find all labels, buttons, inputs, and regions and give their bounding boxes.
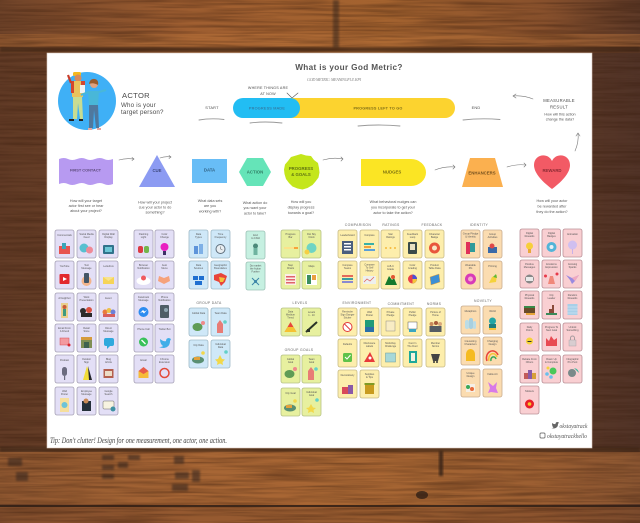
measurable result: RESULT bbox=[550, 104, 568, 110]
shape: first contact: FIRST CONTACT bbox=[70, 168, 102, 172]
cards: first contact bbox=[55, 230, 118, 415]
cards: first contact: Blog bbox=[106, 358, 112, 361]
measurable result: How will this action bbox=[544, 112, 576, 116]
cards: enhancers: Changing bbox=[487, 340, 498, 343]
shape: data bbox=[192, 159, 227, 183]
shape: first contact bbox=[59, 158, 113, 185]
question: progress: display progress bbox=[288, 206, 315, 210]
cards: progress and goals: Charts bbox=[287, 267, 295, 270]
cards: enhancers bbox=[461, 230, 502, 397]
cards: nudges: Public bbox=[409, 311, 417, 314]
cards: progress and goals: Goal bbox=[309, 394, 315, 397]
question: reward: they do the action? bbox=[536, 210, 568, 214]
cards: enhancers: Activities bbox=[488, 236, 498, 239]
actor label: Who is your bbox=[121, 102, 156, 109]
question: data bbox=[198, 199, 222, 214]
cards: reward: Rewards bbox=[525, 235, 535, 238]
cards: nudges: Compare bbox=[364, 234, 375, 237]
cards: first contact: Message bbox=[81, 393, 92, 396]
cards: first contact: Outdoor bbox=[82, 358, 91, 361]
cards: data: City Data bbox=[193, 344, 204, 347]
question: reward: be rewarded after bbox=[538, 204, 567, 208]
cards: action: Further bbox=[251, 270, 260, 274]
cards: reward: Positive bbox=[525, 263, 534, 266]
cards: nudges: Compare bbox=[342, 264, 353, 267]
question: first contact: about your project? bbox=[70, 209, 102, 213]
cards: nudges: Teams bbox=[344, 267, 352, 270]
cards: first contact: Text bbox=[84, 264, 89, 267]
cards: action: End bbox=[253, 234, 258, 237]
section headings: ENVIRONMENT bbox=[343, 301, 371, 305]
cards: nudges: Badge bbox=[431, 236, 439, 239]
cards: nudges: Member bbox=[431, 342, 440, 345]
cards: reward: & Complete bbox=[545, 361, 559, 364]
cards: cue: Notification bbox=[158, 299, 171, 302]
cards: enhancers: Pin bbox=[469, 267, 473, 270]
cards: reward: Others bbox=[526, 361, 534, 364]
cards: reward: Daily bbox=[527, 326, 533, 329]
cards: cue: Auto bbox=[162, 264, 168, 267]
shape: reward heart: REWARD bbox=[542, 168, 562, 173]
cards: action: to Child bbox=[251, 237, 260, 240]
cards: progress and goals: Maps bbox=[308, 265, 315, 268]
cards: nudges: Challenge bbox=[385, 345, 397, 348]
question: progress bbox=[288, 200, 315, 215]
where things are at now: WHERE THINGS ARE bbox=[248, 86, 288, 90]
cards: nudges: The Door bbox=[407, 345, 418, 348]
cards: progress and goals: Step bbox=[288, 264, 294, 267]
question: nudges: actor to take the action? bbox=[373, 211, 413, 215]
question: action: actor to take? bbox=[244, 212, 266, 216]
cards: first contact: Digital Wall bbox=[102, 233, 115, 236]
cards: progress and goals: Levels bbox=[308, 311, 316, 314]
cards: first contact: Podcast bbox=[60, 359, 69, 362]
section headings bbox=[196, 223, 492, 352]
cards: data: Geographic bbox=[214, 264, 228, 267]
cards: nudges: Pledge bbox=[387, 314, 395, 317]
cards: cue: Chrome bbox=[160, 358, 170, 361]
shape: progress and goals: PROGRESS bbox=[289, 166, 313, 171]
cards: reward: Next Goal bbox=[546, 329, 557, 332]
arrow bbox=[323, 157, 343, 161]
cards: reward: Physical bbox=[525, 294, 535, 297]
end label: END bbox=[472, 105, 480, 110]
cards: enhancers: Interesting bbox=[465, 340, 477, 343]
shape: action bbox=[239, 158, 271, 186]
arrow bbox=[507, 163, 526, 167]
cards: nudges: Defaults bbox=[343, 343, 353, 346]
shape: nudges bbox=[361, 159, 426, 186]
measurable result: change the data? bbox=[546, 118, 574, 122]
question: progress: How will you bbox=[291, 200, 311, 204]
question: nudges: What behavioral nudges can bbox=[370, 200, 416, 204]
cards: nudges: Loop bbox=[410, 236, 416, 239]
cards: reward: Points bbox=[526, 329, 534, 332]
cards: nudges: Ratings bbox=[386, 236, 395, 239]
actor label bbox=[121, 91, 164, 116]
handle: twitter: okstayatrack bbox=[560, 423, 588, 430]
cards: nudges: Foot In bbox=[409, 342, 417, 345]
cards: reward: Expression bbox=[545, 266, 558, 269]
cards: first contact: Email From bbox=[58, 327, 71, 330]
cards: first contact: Wall bbox=[62, 390, 67, 393]
cards: enhancers: Priming bbox=[488, 265, 497, 268]
cards: nudges: Multi-Day bbox=[385, 342, 397, 345]
cards: cue: Flashing bbox=[139, 233, 149, 236]
cards: first contact: Event bbox=[105, 297, 112, 300]
cards: first contact: Feed bbox=[84, 236, 90, 239]
poster sheet bbox=[47, 53, 592, 448]
cards: nudges: Pledge bbox=[409, 314, 417, 317]
cards: data: Frequency bbox=[215, 236, 227, 239]
cards: nudges: Grading bbox=[408, 267, 418, 270]
cards: reward: Digital bbox=[548, 232, 555, 235]
cards: reward: Progress To bbox=[545, 326, 559, 329]
section headings: GROUP DATA bbox=[196, 301, 222, 305]
cards: progress and goals: 1 - 10 bbox=[308, 314, 315, 317]
start label: START bbox=[205, 105, 219, 110]
cards: progress and goals: Global bbox=[287, 358, 295, 361]
cards: reward: Rebate From bbox=[522, 358, 537, 361]
cards: cue: Notification bbox=[137, 267, 150, 270]
arrow: now marker bbox=[287, 93, 298, 98]
cards: nudges: Disclosure bbox=[364, 342, 376, 345]
cards: data: Boundaries bbox=[214, 267, 228, 270]
cards: data: Global Data bbox=[192, 312, 206, 315]
cards: reward: City bbox=[549, 294, 554, 297]
cards: cue: Facebook bbox=[138, 296, 150, 299]
progress bar: PROGRESS MADE bbox=[249, 106, 285, 110]
section headings: GROUP GOALS bbox=[285, 348, 314, 352]
cards: first contact: Search bbox=[105, 393, 113, 396]
shape: enhancers: ENHANCERS bbox=[468, 170, 496, 176]
cards: reward bbox=[520, 229, 582, 414]
handle: twitter bbox=[552, 422, 588, 430]
cards: reward: Rewards bbox=[525, 297, 535, 300]
cards: reward: Animation bbox=[567, 233, 579, 236]
cards: nudges: Color bbox=[410, 264, 416, 267]
cards: progress and goals: Clock bbox=[308, 236, 315, 239]
cards: nudges: Labels bbox=[366, 345, 374, 348]
section headings: IDENTITY bbox=[470, 223, 489, 227]
actor label: target person? bbox=[121, 109, 164, 116]
shape: nudges: NUDGES bbox=[383, 170, 401, 174]
cards: data bbox=[189, 230, 230, 368]
cards: progress and goals: Bar bbox=[289, 236, 293, 239]
question: first contact: actor first see or hear bbox=[69, 204, 104, 208]
question: first contact bbox=[69, 199, 104, 213]
shape: reward heart bbox=[534, 155, 570, 189]
cards: first contact: Social Media bbox=[79, 233, 94, 236]
cards: data: Individual bbox=[215, 343, 226, 346]
cards: nudges: Leaderboard bbox=[340, 234, 355, 237]
question: cue: something? bbox=[145, 210, 165, 214]
section headings: LEVELS bbox=[293, 301, 308, 305]
cards: enhancers: Group Pledge bbox=[463, 232, 479, 236]
tip: Tip: Don't clutter! Design for one measurement, one actor, one action. bbox=[50, 436, 227, 445]
cards: cue: Message bbox=[138, 299, 149, 302]
cards: action bbox=[246, 231, 265, 290]
cards: cue: Light bbox=[141, 236, 147, 239]
cards: first contact: Sign bbox=[84, 361, 90, 364]
cards: first contact: Store bbox=[84, 330, 90, 333]
cards: nudges bbox=[338, 230, 445, 398]
cards: nudges: & Tips bbox=[366, 376, 374, 379]
title: What is your God Metric? bbox=[295, 63, 403, 72]
cards: nudges: Feedback bbox=[407, 233, 419, 236]
cards: reward: Growing bbox=[568, 263, 578, 266]
measurable result bbox=[543, 98, 576, 122]
question: first contact: How will your target bbox=[70, 199, 102, 203]
cards: cue bbox=[134, 230, 174, 383]
cards: nudges: Product bbox=[430, 264, 439, 267]
cards: first contact: Google bbox=[104, 390, 113, 393]
arrow: reward to result bbox=[575, 133, 580, 151]
question: cue: How will your project bbox=[138, 200, 172, 204]
cards: first contact: Letterbox bbox=[103, 265, 114, 268]
question: data: working with? bbox=[199, 210, 221, 214]
cards: enhancers: Metaphors bbox=[465, 310, 477, 313]
cards: reward: Leader bbox=[548, 297, 556, 300]
cards: reward: Emotions bbox=[546, 263, 557, 266]
cards: first contact: Poster bbox=[61, 393, 68, 396]
question: reward bbox=[536, 199, 568, 214]
arrow: result to progress bbox=[513, 94, 533, 99]
cards: progress and goals: Dot Sky bbox=[307, 233, 317, 236]
shape: progress and goals bbox=[284, 154, 320, 190]
cards: first contact: Article bbox=[105, 361, 113, 364]
cards: nudges: Sign Danger bbox=[341, 314, 355, 316]
cards: enhancers: & Identity bbox=[465, 236, 476, 238]
cards: cue: Color bbox=[162, 233, 168, 236]
cards: nudges: Grade bbox=[387, 268, 395, 271]
cards: enhancers: Design bbox=[489, 343, 497, 346]
cards: nudges: History bbox=[366, 270, 374, 272]
cards: reward: Digital bbox=[526, 232, 533, 235]
cards: enhancers: Wearable bbox=[465, 264, 476, 267]
question: cue bbox=[138, 200, 172, 214]
cards: progress and goals: Goal bbox=[288, 361, 294, 364]
cards: enhancers: Group bbox=[489, 233, 497, 236]
cards: progress and goals: Trend bbox=[287, 316, 294, 320]
shape: cue: CUE bbox=[152, 168, 162, 173]
cards: nudges: Reminder bbox=[342, 310, 353, 314]
cards: data: Types bbox=[195, 236, 203, 239]
cards: nudges: Decoratively bbox=[341, 374, 355, 377]
cards: enhancers: Characters bbox=[464, 343, 477, 346]
section headings: COMMITMENT bbox=[388, 302, 414, 306]
question: progress: towards a goal? bbox=[288, 211, 314, 215]
cards: first contact: A Friend bbox=[60, 330, 70, 333]
question: cue: cue your actor to do bbox=[139, 206, 171, 210]
section headings: FEEDBACK bbox=[421, 223, 443, 227]
cards: cue: Browser bbox=[139, 264, 148, 267]
cards: first contact: Retail bbox=[83, 327, 90, 330]
question: data: are you bbox=[204, 204, 216, 208]
cards: progress and goals: Individual bbox=[306, 391, 317, 394]
cards: first contact: Message bbox=[103, 330, 114, 333]
cards: progress and goals: Progress bbox=[285, 233, 296, 236]
shape: data: DATA bbox=[204, 168, 215, 172]
cards: progress and goals: Goal bbox=[309, 361, 315, 364]
cards: first contact: Work bbox=[84, 296, 90, 299]
cards: first contact: Display bbox=[104, 236, 113, 239]
question: action: What action do bbox=[243, 201, 267, 205]
cards: nudges: Character bbox=[429, 233, 440, 236]
cards: enhancers: Fable Art bbox=[487, 373, 498, 376]
cards: reward: Messages bbox=[524, 266, 536, 269]
cards: reward: Pro Punt bbox=[568, 361, 578, 364]
subtitle: GOD METRIC: MEANINGFUL KPI bbox=[307, 77, 362, 82]
underline strokes bbox=[199, 119, 500, 126]
cards: reward: Sparks bbox=[569, 266, 577, 269]
question: action: you want your bbox=[244, 206, 267, 210]
cards: action: the Action bbox=[250, 268, 262, 270]
question: reward: How will your actor bbox=[537, 199, 568, 203]
cards: reward: Random bbox=[568, 294, 577, 297]
cards: nudges: Picture of bbox=[430, 311, 441, 314]
cards: progress and goals: Data bbox=[288, 310, 294, 314]
cards: data: Team Data bbox=[214, 312, 227, 315]
cards: enhancers: Unique bbox=[467, 372, 475, 375]
where things are at now: AT NOW bbox=[260, 92, 276, 96]
arrow bbox=[160, 156, 171, 158]
shape: progress and goals: & GOALS bbox=[291, 172, 311, 177]
cards: enhancers: Design bbox=[467, 375, 475, 378]
cards: nudges: Sticker bbox=[344, 316, 351, 320]
cards: first contact: Presentation bbox=[79, 299, 94, 302]
cards: nudges: Table Data bbox=[429, 267, 441, 270]
cards: action: Do market bbox=[250, 264, 262, 268]
cards: nudges: Home bbox=[432, 314, 439, 317]
arrow bbox=[435, 165, 455, 170]
section headings: RATINGS bbox=[382, 223, 400, 227]
cards: progress and goals: Medium bbox=[286, 314, 295, 316]
actor illustration bbox=[58, 72, 116, 130]
cards: nudges: Wall bbox=[367, 311, 372, 314]
cards: data: Data bbox=[196, 264, 202, 267]
cards: nudges: Norms bbox=[432, 345, 440, 348]
cards: nudges: Star bbox=[388, 233, 393, 236]
cards: cue: Menu bbox=[161, 267, 168, 270]
cards: first contact: Direct bbox=[105, 327, 112, 330]
section headings: NOVELTY bbox=[474, 299, 492, 303]
cards: nudges: Private bbox=[387, 311, 395, 314]
cards: cue: Twitter Bot bbox=[159, 328, 171, 331]
arrow bbox=[119, 158, 134, 160]
cards: first contact: Message bbox=[81, 267, 92, 270]
cards: nudges: To Self bbox=[366, 266, 374, 270]
cards: cue: Change bbox=[160, 236, 169, 239]
cards: reward: Roam Up bbox=[546, 358, 557, 361]
cards: reward: Infographic bbox=[566, 358, 579, 361]
question: nudges bbox=[370, 200, 416, 215]
progress bar bbox=[233, 98, 455, 118]
cards: first contact: YouTube bbox=[60, 265, 70, 268]
cards: nudges: A-B-C bbox=[387, 265, 394, 268]
cards: progress and goals: Team bbox=[308, 358, 315, 361]
progress bar: PROGRESS LEFT TO GO bbox=[353, 106, 403, 110]
cards: data: Sources bbox=[194, 267, 204, 270]
cards: progress and goals: City Goal bbox=[285, 392, 296, 395]
cards: reward: Unlock bbox=[569, 326, 577, 329]
measurable result: MEASURABLE bbox=[543, 98, 575, 103]
shape: cue bbox=[139, 155, 175, 187]
cards: progress and goals bbox=[281, 230, 321, 416]
where things are at now bbox=[248, 86, 288, 96]
cards: data: Data bbox=[218, 346, 224, 349]
cards: cue: Extension bbox=[159, 361, 171, 364]
cards: cue: Email bbox=[140, 359, 147, 362]
cards: nudges: Poster bbox=[366, 314, 373, 317]
cards: cue: Phone Call bbox=[137, 328, 150, 331]
cards: first contact: A Neighbor bbox=[58, 297, 71, 300]
actor label: ACTOR bbox=[122, 91, 150, 100]
cards: first contact: Employee bbox=[81, 390, 93, 393]
cards: reward: Badges bbox=[547, 235, 556, 238]
cards: data: Data bbox=[196, 233, 202, 236]
cards: reward: Rewards bbox=[568, 297, 578, 300]
cards: enhancers: World bbox=[489, 310, 496, 313]
section headings: NORMS bbox=[427, 302, 442, 306]
question: action bbox=[243, 201, 267, 216]
question: data: What data sets bbox=[198, 199, 222, 203]
cards: reward: Stickers bbox=[525, 390, 535, 393]
handle: instagram: okstayatrackhello bbox=[547, 433, 588, 440]
cards: reward: Something bbox=[567, 329, 579, 332]
shape: enhancers bbox=[462, 158, 503, 187]
cards: nudges: Compare bbox=[364, 264, 375, 266]
shape: action: ACTION bbox=[247, 170, 263, 174]
cards: data: Time bbox=[218, 233, 224, 236]
cards: nudges: Supplies bbox=[365, 373, 375, 376]
cards: cue: Phone bbox=[161, 296, 169, 299]
question: nudges: you incorporate to get your bbox=[371, 206, 416, 210]
cards: first contact: Commercials bbox=[57, 234, 73, 237]
section headings: COMPARISON bbox=[345, 223, 371, 227]
